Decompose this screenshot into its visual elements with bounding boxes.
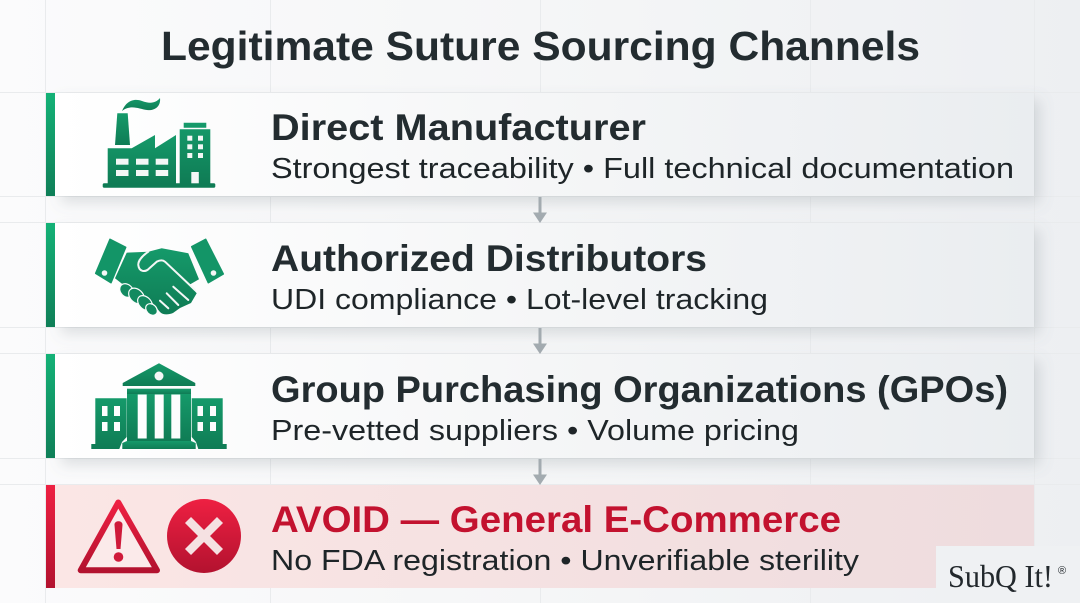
logo: SubQ It!: SubQ It! [948, 558, 1053, 594]
logo: SubQ It!: ® [1058, 565, 1066, 577]
heading: avoid general e-commerce: AVOID — General E-Commerce [271, 499, 841, 540]
arrow [533, 197, 547, 223]
icon: warning triangle [81, 502, 157, 570]
arrow [533, 459, 547, 485]
icon: handshake [96, 239, 223, 318]
panel: direct manufacturer [46, 93, 1034, 196]
icon: error circle with x [167, 499, 241, 573]
heading: group purchasing organizations: Group Purchasing Organizations (GPOs) [271, 369, 1008, 410]
icon: institution building [91, 363, 227, 449]
heading: direct manufacturer: Direct Manufacturer [271, 107, 646, 148]
text: avoid details: No FDA registration • Unverifiable sterility [271, 545, 860, 577]
panel: group purchasing organizations [46, 354, 1034, 458]
panel: avoid general e-commerce [46, 485, 1034, 588]
icon: factory [103, 98, 215, 188]
heading: authorized distributors: Authorized Distributors [271, 238, 707, 279]
title: Legitimate Suture Sourcing Channels [161, 23, 920, 69]
arrow [533, 328, 547, 354]
text: direct manufacturer details: Strongest traceability • Full technical documentation [271, 153, 1014, 185]
text: authorized distributors details: UDI compliance • Lot-level tracking [271, 284, 768, 316]
panel: authorized distributors [46, 223, 1034, 327]
logo: SubQ It! [936, 546, 1080, 603]
text: group purchasing details: Pre-vetted suppliers • Volume pricing [271, 415, 799, 447]
